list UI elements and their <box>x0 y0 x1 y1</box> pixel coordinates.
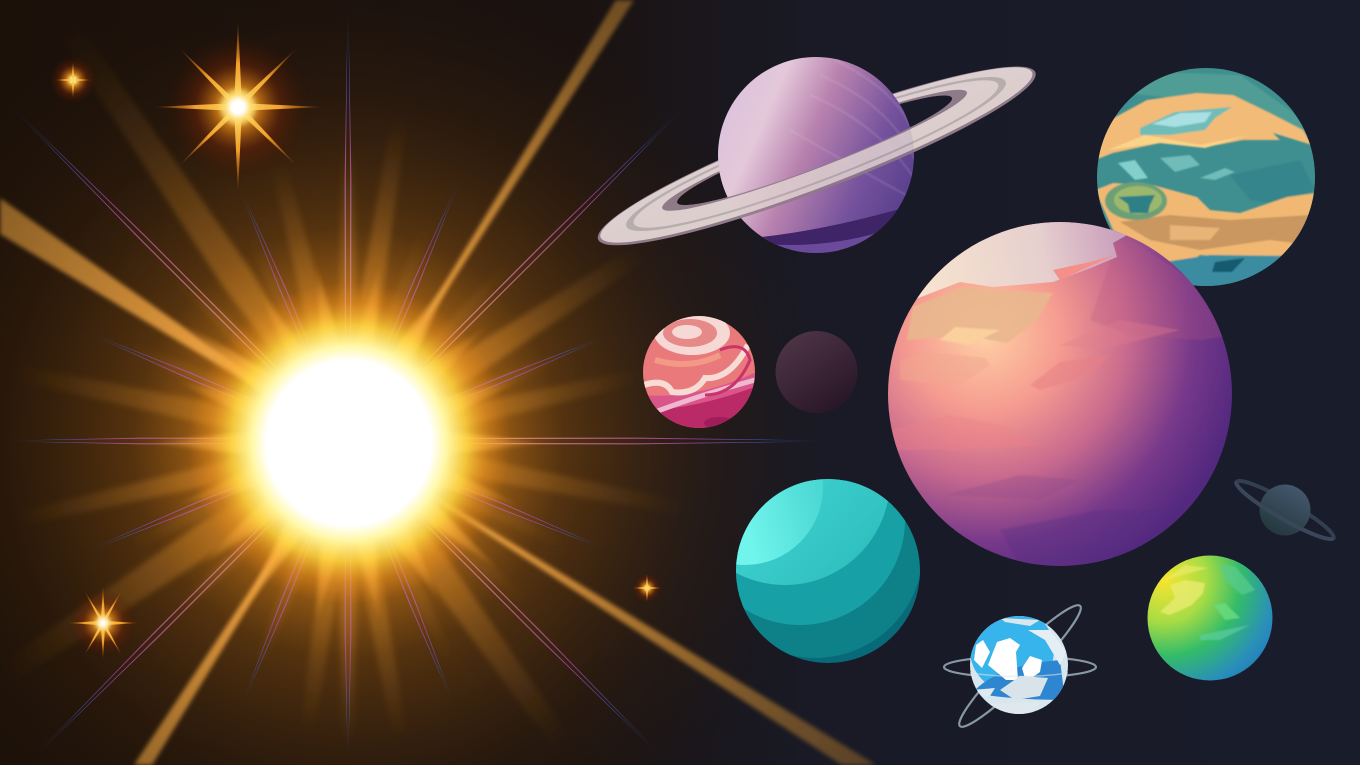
planet: small dark <box>776 331 858 413</box>
sun wide rays <box>0 20 689 752</box>
planet: ice blue with orbits <box>944 597 1096 735</box>
planet: green and blue <box>1145 553 1275 683</box>
rose streaks <box>1031 362 1073 390</box>
planet: tiny dark ringed <box>1232 474 1338 546</box>
sun thin coloured rays <box>3 3 833 764</box>
sun strong rays <box>0 0 876 765</box>
star flare: small right <box>632 573 662 603</box>
lower teal <box>1168 254 1282 286</box>
pale top cap <box>917 222 1126 298</box>
planet: ringed purple <box>598 57 1036 253</box>
planet: small red swirled <box>643 316 755 428</box>
purple streaks <box>950 475 1070 498</box>
tan patches <box>907 287 1053 343</box>
planet: teal <box>736 479 920 663</box>
upper orange band <box>1095 93 1312 160</box>
lower orange band <box>1095 183 1315 270</box>
planet: banded teal and orange <box>1097 68 1315 286</box>
green oval storm <box>1105 182 1167 220</box>
star flare: large top <box>153 20 323 194</box>
star flare: lower left <box>67 585 139 661</box>
planet: large pink and purple <box>880 215 1240 575</box>
mid teal swirls <box>1118 160 1148 180</box>
light cloud <box>1140 107 1232 135</box>
sun core <box>187 281 511 605</box>
warm top-right band <box>1091 254 1222 340</box>
star flare: small top left <box>49 56 97 104</box>
sun inner spikes <box>148 259 548 627</box>
